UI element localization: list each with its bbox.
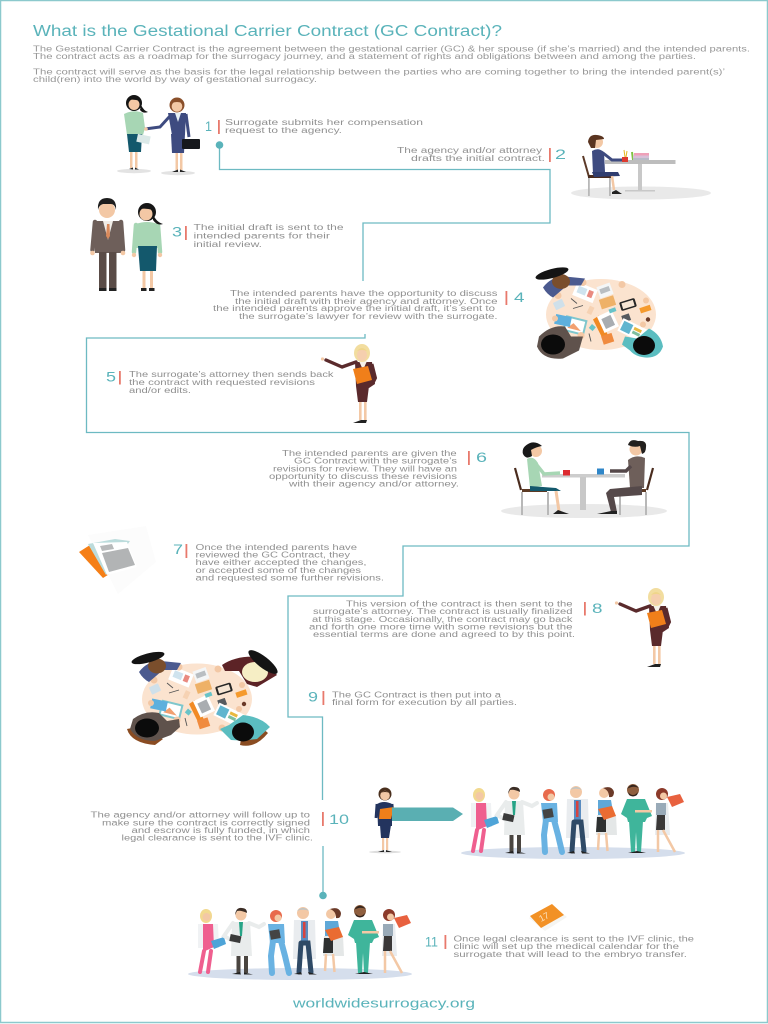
- step 6: [269, 449, 487, 488]
- icon: woman at desk: [571, 135, 711, 200]
- number 8: 8: [592, 600, 603, 616]
- title: What is the Gestational Carrier Contract (GC Contract)?: [33, 23, 502, 40]
- icon: medical team (bottom): [188, 905, 412, 980]
- text 7: and requested some further revisions.: [196, 574, 384, 582]
- text 9: [332, 690, 517, 707]
- text 8: surrogate’s attorney. The contract is usually finalized: [313, 607, 572, 616]
- text 1: request to the agency.: [225, 126, 342, 135]
- end dot: [319, 892, 327, 899]
- text 8: and forth one more time with some revisions but the: [309, 622, 573, 632]
- text 10: legal clearance is sent to the IVF clinic.: [122, 834, 313, 842]
- text 7: have either accepted the changes,: [196, 558, 366, 567]
- step 11: [425, 934, 695, 959]
- number 3: 3: [172, 224, 182, 240]
- text 5: The surrogate’s attorney then sends back: [129, 370, 335, 379]
- step 5: [106, 368, 335, 395]
- text 3: intended parents for their: [194, 232, 331, 240]
- text 6: [269, 449, 459, 488]
- number 1: 1: [205, 118, 212, 134]
- icon: two women shaking hands: [117, 95, 200, 175]
- text 4: The intended parents have the opportunity to discuss: [230, 289, 498, 298]
- step 9: [308, 688, 517, 707]
- intro text: The contract will serve as the basis for the legal relationship between the parties who are coming together to bring the intended parent(s)’: [33, 68, 725, 76]
- divider 3: [185, 226, 187, 240]
- icon: two people at a table: [501, 440, 667, 518]
- text 8: This version of the contract is then sent to the: [346, 600, 573, 608]
- text 10: The agency and/or attorney will follow up to: [90, 810, 311, 820]
- text 7: [196, 543, 384, 582]
- icon: calendar: [529, 904, 567, 931]
- divider 6: [468, 451, 470, 465]
- text 2: drafts the initial contract.: [411, 154, 545, 163]
- divider 7: [186, 544, 187, 558]
- text 7: reviewed the GC Contract, they: [196, 550, 350, 560]
- text 2: The agency and/or attorney: [397, 146, 542, 155]
- icon: attorney pointing: [321, 344, 376, 423]
- divider 9: [322, 691, 324, 705]
- text 6: with their agency and/or attorney.: [288, 480, 459, 488]
- number 7: 7: [173, 541, 183, 557]
- number 6: 6: [476, 449, 487, 465]
- text 6: opportunity to discuss these revisions: [269, 472, 457, 481]
- text 10: and escrow is fully funded, in which: [132, 826, 310, 835]
- footer website: worldwidesurrogacy.org: [292, 996, 475, 1010]
- text 8: essential terms are done and agreed to by this point.: [313, 630, 575, 639]
- text 6: GC Contract with the surrogate’s: [294, 456, 457, 466]
- icon: woman with folder: [369, 788, 401, 853]
- step 10: [90, 810, 349, 842]
- text 1: Surrogate submits her compensation: [225, 118, 423, 127]
- text 8: [309, 600, 575, 639]
- text 6: revisions for review. They will have an: [273, 464, 457, 474]
- arrow to medical team: [392, 808, 463, 821]
- number 4: 4: [514, 289, 525, 305]
- icon: attorney pointing (right): [615, 588, 670, 667]
- step 3: [172, 223, 344, 249]
- number 2: 2: [555, 146, 566, 162]
- intro text: The Gestational Carrier Contract is the agreement between the gestational carrier (GC) & her spouse (if she’s married) and the intended parents.: [33, 44, 750, 54]
- text 5: and/or edits.: [129, 386, 191, 395]
- text 4: [213, 289, 498, 321]
- start dot: [216, 141, 223, 149]
- text 4: the initial draft with their agency and attorney. Once: [235, 297, 498, 306]
- text 11: Once legal clearance is sent to the IVF clinic, the: [454, 934, 695, 944]
- text 10: make sure the contract is correctly signed: [102, 818, 310, 828]
- text 9: The GC Contract is then put into a: [332, 690, 502, 700]
- divider 8: [584, 602, 586, 616]
- icon: meeting table top view (four people): [127, 647, 281, 746]
- divider 10: [322, 812, 324, 826]
- number 10: 10: [329, 811, 349, 827]
- text 7: Once the intended parents have: [196, 543, 358, 552]
- divider 1: [218, 120, 220, 134]
- step 7: [173, 541, 384, 582]
- text 5: the contract with requested revisions: [129, 378, 315, 387]
- icon: medical team (top): [461, 784, 685, 859]
- intro text: [33, 44, 750, 84]
- text 3: initial review.: [194, 240, 262, 249]
- text 7: or accepted some of the changes: [196, 566, 361, 575]
- divider 2: [549, 148, 551, 162]
- intro text: child(ren) into the world by way of gestational surrogacy.: [33, 75, 317, 84]
- text 3: [194, 223, 344, 249]
- text 3: The initial draft is sent to the: [194, 223, 344, 232]
- icon: calendar: 17: [537, 910, 551, 924]
- text 4: the surrogate’s lawyer for review with the surrogate.: [239, 312, 498, 321]
- text 8: at this stage. Occasionally, the contract may go back: [312, 615, 574, 624]
- divider 11: [444, 935, 446, 949]
- text 6: The intended parents are given the: [282, 449, 457, 458]
- number 5: 5: [106, 368, 116, 384]
- text 11: [454, 934, 695, 959]
- text 11: clinic will set up the medical calendar for the: [454, 942, 680, 951]
- intro text: The contract acts as a roadmap for the surrogacy journey, and a statement of rights and obligations between and among the parties.: [33, 52, 696, 61]
- text 10: [90, 810, 313, 842]
- step 2: [397, 146, 566, 163]
- text 11: surrogate that will lead to the embryo transfer.: [454, 950, 687, 959]
- text 2: [397, 146, 545, 163]
- divider 4: [506, 291, 507, 305]
- text 4: the intended parents approve the initial draft, it’s sent to: [213, 304, 496, 313]
- step 1: [205, 118, 423, 135]
- number 11: 11: [425, 934, 438, 950]
- text 5: [129, 370, 335, 395]
- number 9: 9: [308, 688, 318, 704]
- divider 5: [119, 371, 121, 384]
- connector roadmap line: [86, 145, 689, 893]
- icon: contract documents: [79, 526, 156, 594]
- text 1: [225, 118, 423, 135]
- icon: man and woman standing: [90, 198, 163, 291]
- text 9: final form for execution by all parties.: [332, 698, 517, 707]
- step 4: [213, 289, 525, 321]
- icon: meeting table top view (three people): [534, 265, 663, 359]
- step 8: [309, 600, 603, 639]
